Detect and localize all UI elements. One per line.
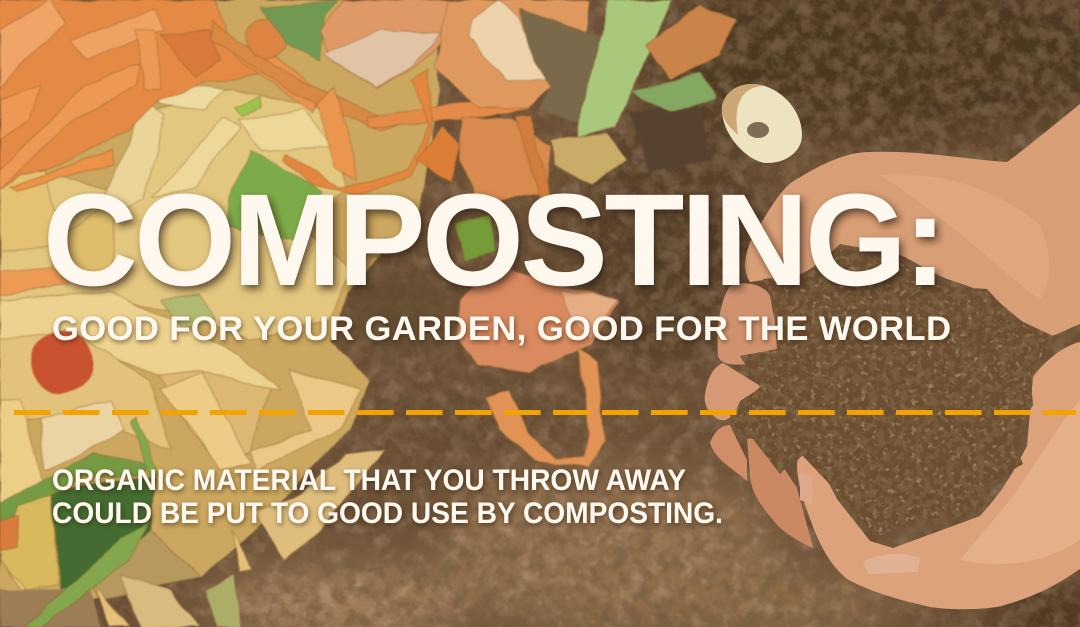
tomato [31, 331, 93, 393]
finger four [747, 436, 813, 548]
potato peels [0, 90, 350, 340]
body text: COULD BE PUT TO GOOD USE BY COMPOSTING. [52, 497, 723, 530]
lower palm [797, 342, 1080, 609]
dark soil between title and subtitle [345, 275, 455, 345]
lower eggshell [455, 265, 620, 372]
greens top-centre [577, 0, 672, 137]
food scraps [0, 0, 735, 627]
body text [52, 464, 723, 530]
dark clod [629, 105, 710, 172]
carrot peels [0, 0, 260, 190]
title: COMPOSTING: [43, 166, 947, 313]
eggshell right of greens [645, 5, 735, 80]
soil lower-left [0, 590, 100, 627]
subtitle: GOOD FOR YOUR GARDEN, GOOD FOR THE WORLD [52, 310, 951, 348]
eggshell, top [321, 0, 447, 88]
small peels bottom [120, 575, 200, 627]
finger one [718, 283, 780, 365]
small cream eggshell [722, 84, 802, 163]
body text: ORGANIC MATERIAL THAT YOU THROW AWAY [52, 464, 686, 497]
finger three [710, 425, 747, 481]
potato, centre [551, 133, 627, 183]
greens top-left [260, 0, 338, 60]
base under peels [0, 0, 440, 600]
lower-left leaf and stems [52, 477, 156, 590]
orange ribbon [486, 348, 605, 468]
finger two [705, 363, 762, 420]
soil pile [720, 240, 1065, 540]
upper hand [745, 104, 1080, 337]
hands holding soil [705, 104, 1080, 609]
eggshell, broken [434, 0, 590, 107]
dashed divider [14, 410, 1076, 415]
